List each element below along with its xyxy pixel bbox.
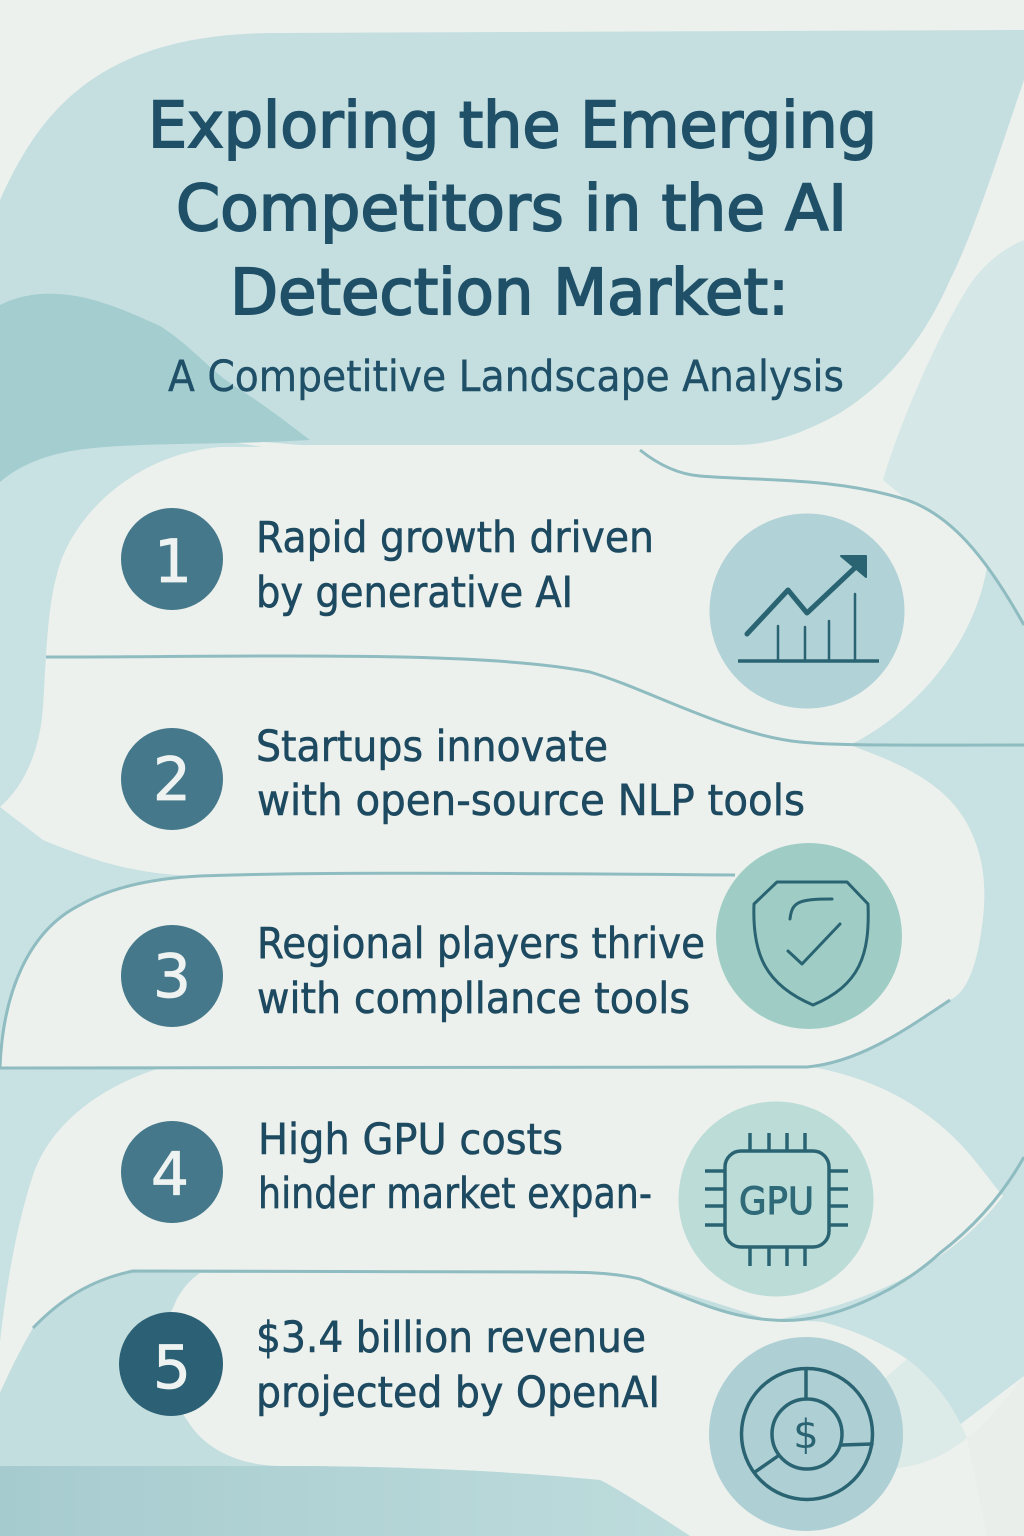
title: Exploring the Emerging — [148, 89, 877, 162]
text 2: Startups innovate — [256, 722, 608, 772]
icon: GPU chip — [678, 1102, 874, 1296]
number badge 1 — [121, 508, 223, 610]
item 4 — [121, 1102, 874, 1296]
item 3 — [121, 843, 902, 1029]
icon: growth chart — [710, 514, 904, 708]
title — [148, 89, 877, 329]
text 1: Rapid growth driven — [256, 513, 654, 563]
text 4: hinder market expan- — [258, 1169, 652, 1219]
text 1 — [256, 513, 654, 618]
number badge 5: 5 — [153, 1333, 191, 1403]
icon: GPU chip: GPU — [739, 1180, 814, 1223]
number badge 4 — [121, 1121, 223, 1223]
number badge 5 — [119, 1312, 223, 1416]
text 1: by generative AI — [256, 568, 573, 618]
text 3: with compllance tools — [257, 974, 690, 1024]
item 1 — [121, 508, 904, 708]
text 2: with open-source NLP tools — [257, 776, 805, 826]
number badge 4: 4 — [151, 1140, 189, 1210]
icon: revenue ring: $ — [793, 1412, 819, 1458]
number badge 1: 1 — [154, 527, 192, 597]
icon: revenue ring — [709, 1337, 903, 1531]
text 4 — [258, 1115, 652, 1219]
title: Competitors in the AI — [176, 172, 847, 245]
flowing divider lines — [0, 450, 1024, 1328]
subtitle: A Competitive Landscape Analysis — [168, 352, 844, 402]
text 5: projected by OpenAI — [256, 1368, 660, 1418]
number badge 3 — [121, 925, 223, 1027]
number badge 2: 2 — [153, 745, 191, 815]
text 3 — [257, 919, 705, 1024]
text 2 — [256, 722, 805, 826]
number badge 3: 3 — [153, 942, 191, 1012]
icon: shield — [716, 843, 902, 1029]
text 5: $3.4 billion revenue — [256, 1313, 646, 1363]
text 5 — [256, 1313, 660, 1418]
title: Detection Market: — [230, 256, 789, 329]
text 3: Regional players thrive — [257, 919, 705, 969]
item 5 — [119, 1312, 903, 1531]
number badge 2 — [121, 728, 223, 830]
item 2 — [121, 722, 805, 830]
text 4: High GPU costs — [258, 1115, 563, 1165]
